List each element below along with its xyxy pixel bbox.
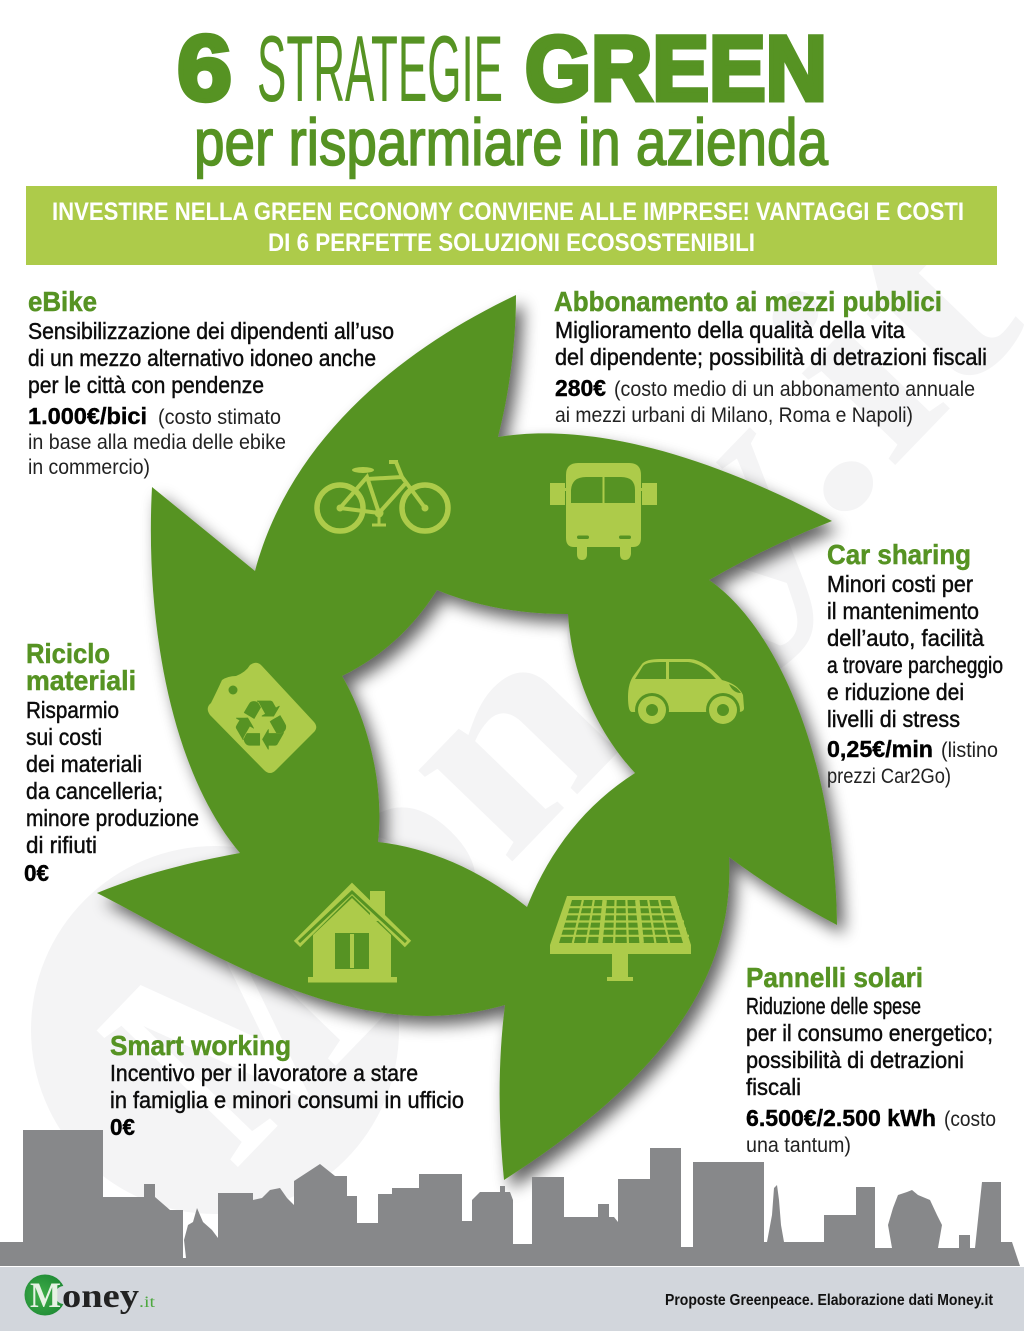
text block: Riciclo materiali: Risparmio xyxy=(26,697,119,723)
icon: recycling tag: ♻ xyxy=(231,687,291,766)
text block: Pannelli solari: Pannelli solari xyxy=(746,962,923,993)
text block: Riciclo materiali: 0€ xyxy=(24,860,49,886)
text block: Riciclo materiali: dei materiali xyxy=(26,751,142,777)
icon: house xyxy=(297,889,408,982)
watermark: Money.it xyxy=(31,148,1024,1215)
icon: bicycle xyxy=(317,462,448,531)
text block: Pannelli solari: possibilità di detrazioni xyxy=(746,1047,964,1073)
text block: Abbonamento ai mezzi pubblici: Miglioramento della qualità della vita xyxy=(555,317,905,343)
text block: Car sharing: livelli di stress xyxy=(827,706,960,732)
text block: Pannelli solari: (costo xyxy=(944,1108,996,1131)
logo: Money.it: oney xyxy=(62,1278,139,1315)
text block: Abbonamento ai mezzi pubblici xyxy=(554,286,987,427)
text block: Smart working: 0€ xyxy=(110,1114,135,1140)
text block: Abbonamento ai mezzi pubblici: (costo medio di un abbonamento annuale xyxy=(614,378,975,401)
text block: Riciclo materiali: Riciclo xyxy=(26,638,110,669)
title xyxy=(177,16,828,179)
text block: Car sharing xyxy=(827,539,1003,788)
text block: Car sharing: prezzi Car2Go) xyxy=(827,765,951,788)
text block: eBike: (costo stimato xyxy=(158,406,281,429)
footer bar xyxy=(0,1267,1024,1331)
watermark: Money.it: oney.it xyxy=(210,148,1024,1028)
text block: Pannelli solari: Riduzione delle spese xyxy=(746,993,921,1019)
text block: Smart working: in famiglia e minori consumi in ufficio xyxy=(110,1087,464,1113)
text block: Smart working: Smart working xyxy=(110,1030,291,1061)
title: 6 xyxy=(177,16,232,120)
subtitle banner: DI 6 PERFETTE SOLUZIONI ECOSOSTENIBILI xyxy=(268,229,755,257)
text block: Riciclo materiali: minore produzione xyxy=(26,805,199,831)
text block: Smart working: Incentivo per il lavoratore a stare xyxy=(110,1060,418,1086)
text block: Car sharing: e riduzione dei xyxy=(827,679,964,705)
city skyline xyxy=(0,1130,1020,1266)
text block: Abbonamento ai mezzi pubblici: del dipendente; possibilità di detrazioni fiscali xyxy=(555,344,987,370)
text block: Riciclo materiali: sui costi xyxy=(26,724,102,750)
text block: Pannelli solari: una tantum) xyxy=(746,1134,851,1157)
text block: Riciclo materiali: da cancelleria; xyxy=(26,778,163,804)
icon: car xyxy=(628,659,744,727)
icon: solar panel xyxy=(550,896,691,981)
logo: Money.it: .it xyxy=(139,1294,156,1311)
text block: Car sharing: 0,25€/min xyxy=(827,736,933,762)
icon: recycling tag xyxy=(208,663,316,773)
title: GREEN xyxy=(525,18,827,120)
text block: eBike xyxy=(28,286,394,479)
text block: Riciclo materiali xyxy=(24,638,199,886)
text block: eBike: Sensibilizzazione dei dipendenti all’uso xyxy=(28,318,394,344)
watermark: Money.it: M xyxy=(43,818,443,1215)
text block: eBike: di un mezzo alternativo idoneo anche xyxy=(28,345,376,371)
title: per risparmiare in azienda xyxy=(194,105,828,179)
text block: Riciclo materiali: materiali xyxy=(26,665,136,696)
text block: Riciclo materiali: di rifiuti xyxy=(26,832,97,858)
text block: Car sharing: dell’auto, facilità xyxy=(827,625,984,651)
subtitle banner xyxy=(26,186,997,265)
text block: Pannelli solari: fiscali xyxy=(746,1074,801,1100)
text block: Abbonamento ai mezzi pubblici: 280€ xyxy=(555,375,606,401)
text block: Abbonamento ai mezzi pubblici: ai mezzi urbani di Milano, Roma e Napoli) xyxy=(555,404,913,427)
text block: eBike: in commercio) xyxy=(28,456,150,479)
text block: Car sharing: il mantenimento xyxy=(827,598,979,624)
icon: bus xyxy=(550,463,657,560)
text block: eBike: eBike xyxy=(28,286,97,317)
logo: Money.it xyxy=(24,1274,156,1316)
logo: Money.it: M xyxy=(30,1275,61,1315)
text block: Car sharing: Car sharing xyxy=(827,539,971,570)
text block: Smart working xyxy=(110,1030,464,1140)
text block: eBike: 1.000€/bici xyxy=(28,403,147,429)
text block: Car sharing: Minori costi per xyxy=(827,571,973,597)
text block: Abbonamento ai mezzi pubblici: Abbonamento ai mezzi pubblici xyxy=(554,286,942,317)
text block: Pannelli solari xyxy=(746,962,996,1157)
text block: Pannelli solari: 6.500€/2.500 kWh xyxy=(746,1105,936,1131)
text block: Car sharing: (listino xyxy=(941,739,998,762)
text block: eBike: per le città con pendenze xyxy=(28,372,264,398)
flower of six green leaves xyxy=(97,295,837,1180)
title: STRATEGIE xyxy=(257,16,503,121)
text block: eBike: in base alla media delle ebike xyxy=(28,431,286,454)
text block: Pannelli solari: per il consumo energetico; xyxy=(746,1020,993,1046)
